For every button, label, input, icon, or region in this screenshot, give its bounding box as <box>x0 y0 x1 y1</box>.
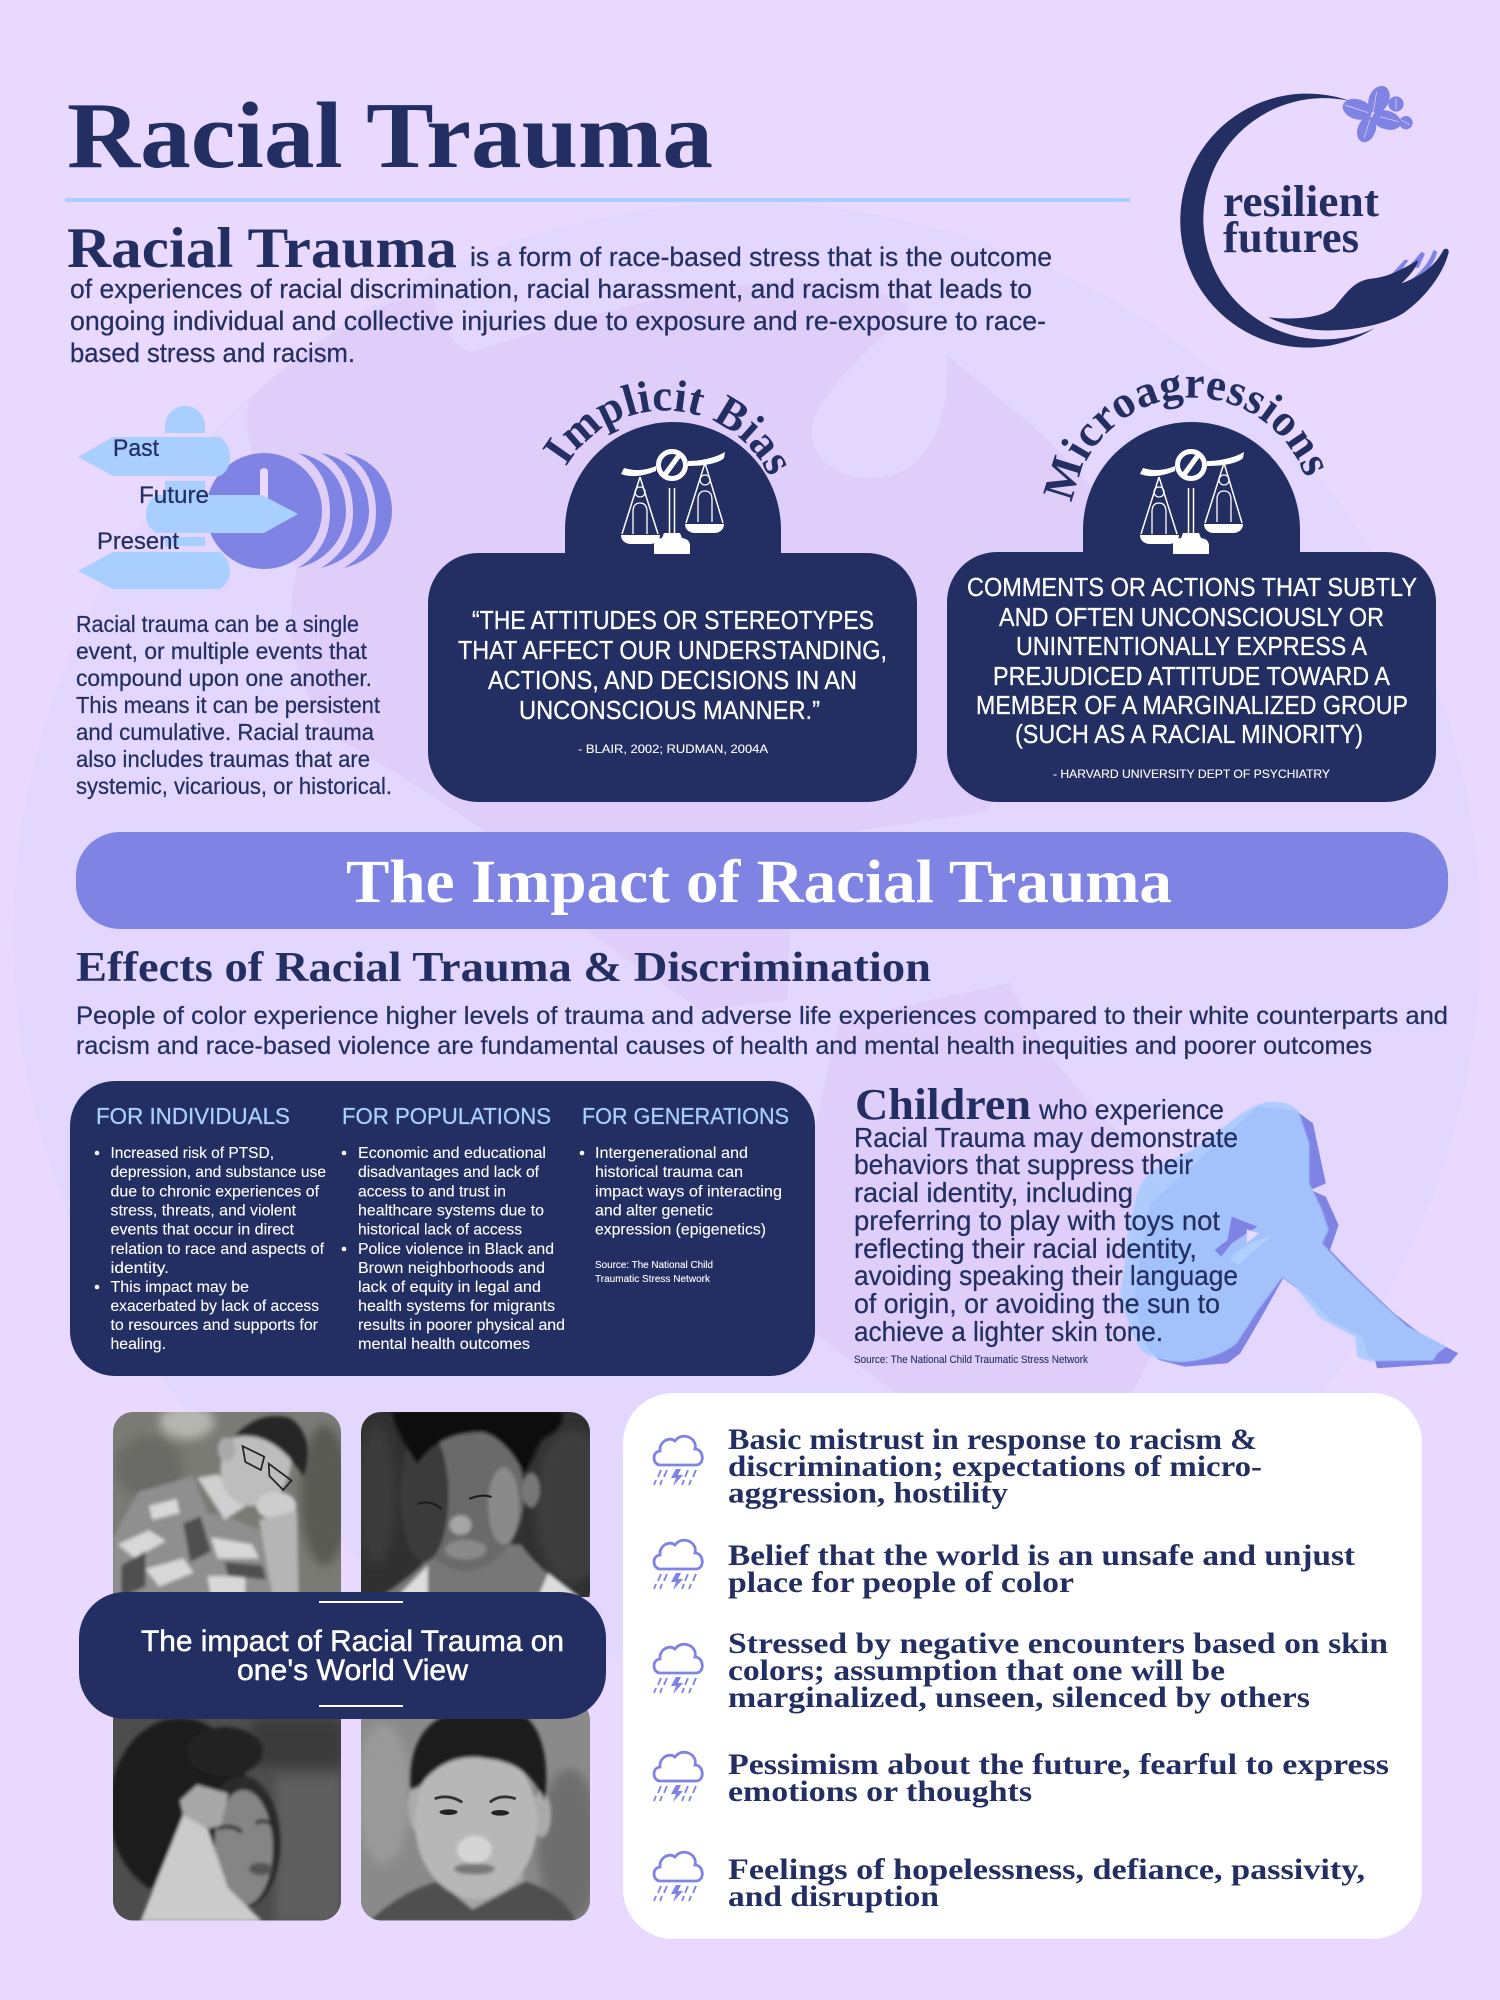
text: racial trauma can be single or multiple: compound upon one another. <box>76 665 372 691</box>
column: for individuals: to resources and supports for <box>110 1317 319 1334</box>
text: children: Racial Trauma may demonstrate <box>854 1122 1238 1153</box>
text: children: Source: The National Child Traumatic Stress Network <box>854 1354 1088 1366</box>
text: children: achieve a lighter skin tone. <box>854 1316 1163 1347</box>
column: for generations: impact ways of interacting <box>595 1184 782 1200</box>
icon: clock and signpost: Present <box>97 528 179 555</box>
icon: clock and signpost: Future <box>139 482 209 509</box>
item: negative encounters: Stressed by negative encounters based on skin <box>728 1627 1388 1660</box>
item: hopelessness: and disruption <box>728 1880 939 1913</box>
photo: girl looking down <box>361 1412 590 1598</box>
column: for individuals: healing. <box>110 1336 166 1353</box>
column: for generations: FOR GENERATIONS <box>582 1103 789 1129</box>
text: people of color: People of color experience higher levels of trauma and adverse life experiences compared to their white counterparts and <box>76 1002 1448 1030</box>
column: for individuals: due to chronic experiences of <box>110 1184 320 1200</box>
column: for individuals: This impact may be <box>110 1279 249 1296</box>
column: for populations: Police violence in Black and <box>358 1241 554 1258</box>
definition paragraph: ongoing individual and collective injuries due to exposure and re-exposure to race- <box>70 306 1046 336</box>
definition: UNINTENTIONALLY EXPRESS A <box>1016 633 1367 661</box>
title: Racial Trauma <box>67 84 713 188</box>
text: racial trauma can be single or multiple: systemic, vicarious, or historical. <box>76 773 392 799</box>
heading: effects of racial trauma: Effects of Racial Trauma & Discrimination <box>76 945 931 991</box>
quote: THAT AFFECT OUR UNDERSTANDING, <box>458 637 887 665</box>
column: for populations: access to and trust in <box>358 1184 506 1200</box>
text: children: behaviors that suppress their <box>854 1149 1193 1180</box>
quote <box>458 607 887 725</box>
column: for individuals: stress, threats, and violent <box>110 1202 297 1220</box>
icon: storm cloud <box>654 1852 702 1902</box>
title divider <box>65 198 1130 202</box>
panel: microagressions: - HARVARD UNIVERSITY DEPT OF PSYCHIATRY <box>1053 767 1330 781</box>
item: unsafe world: Belief that the world is an unsafe and unjust <box>728 1539 1355 1572</box>
column: for populations <box>342 1103 565 1353</box>
logo: resilient futures <box>1180 82 1449 348</box>
column: for generations: Traumatic Stress Network <box>595 1273 711 1285</box>
column: for individuals <box>95 1103 326 1353</box>
column: for populations: healthcare systems due to <box>358 1202 544 1220</box>
text: racial trauma can be single or multiple: and cumulative. Racial trauma <box>76 719 375 745</box>
column: for individuals: events that occur in direct <box>110 1222 295 1238</box>
panel: implicit bias <box>428 380 917 802</box>
text: racial trauma can be single or multiple <box>76 611 392 799</box>
column: for generations: historical trauma can <box>595 1164 743 1181</box>
item: unsafe world <box>654 1539 1355 1599</box>
item: basic mistrust: aggression, hostility <box>728 1476 1008 1510</box>
banner: the impact on world view: one's World View <box>237 1654 468 1687</box>
panel: implicit bias: - BLAIR, 2002; RUDMAN, 2004A <box>578 742 768 756</box>
definition paragraph: based stress and racism. <box>70 338 355 368</box>
column: for generations: and alter genetic <box>595 1202 713 1220</box>
photo: boy frowning <box>356 1706 600 1923</box>
column: for generations: Intergenerational and <box>595 1145 748 1162</box>
panel: effects by level <box>70 1081 815 1376</box>
icon: scales <box>621 452 725 554</box>
column: for individuals: Increased risk of PTSD, <box>110 1145 274 1162</box>
definition paragraph: is a form of race-based stress that is the outcome <box>470 242 1052 272</box>
column: for generations <box>580 1103 789 1285</box>
item: basic mistrust: discrimination; expectations of micro- <box>728 1450 1262 1483</box>
column: for individuals: FOR INDIVIDUALS <box>96 1103 290 1129</box>
column: for populations: health systems for migrants <box>358 1298 555 1315</box>
quote: ACTIONS, AND DECISIONS IN AN <box>488 667 857 695</box>
text: children: reflecting their racial identity, <box>854 1233 1197 1264</box>
definition: AND OFTEN UNCONSCIOUSLY OR <box>999 604 1384 632</box>
photo: girl with hand on forehead <box>109 1706 345 1923</box>
definition: COMMENTS OR ACTIONS THAT SUBTLY <box>967 574 1417 602</box>
dome and card <box>947 422 1436 802</box>
figure: seated child silhouette <box>1121 1102 1458 1368</box>
definition paragraph: Racial Trauma <box>67 217 457 280</box>
item: negative encounters: marginalized, unseen, silenced by others <box>728 1681 1310 1714</box>
item: basic mistrust: Basic mistrust in response to racism & <box>728 1423 1257 1456</box>
item: pessimism: Pessimism about the future, fearful to express <box>728 1748 1389 1781</box>
item: hopelessness <box>654 1852 1365 1913</box>
text: racial trauma can be single or multiple: also includes traumas that are <box>76 746 370 772</box>
item: unsafe world: place for people of color <box>728 1566 1074 1599</box>
clock <box>206 453 392 569</box>
icon: storm cloud <box>654 1540 702 1590</box>
banner: the impact of racial trauma <box>76 832 1448 929</box>
icon: clock and signpost <box>78 406 392 589</box>
item: basic mistrust <box>654 1423 1262 1510</box>
icon: storm cloud <box>654 1644 702 1694</box>
item: hopelessness: Feelings of hopelessness, defiance, passivity, <box>728 1853 1365 1886</box>
text: racial trauma can be single or multiple: Racial trauma can be a single <box>76 611 359 637</box>
photo: boy with glasses <box>111 1404 349 1597</box>
text: children: preferring to play with toys not <box>854 1205 1220 1236</box>
icon: flower <box>1340 82 1413 145</box>
text: people of color: racism and race-based violence are fundamental causes of health and mental health inequities and poorer outcomes <box>76 1032 1372 1060</box>
column: for individuals: identity. <box>110 1260 169 1277</box>
text: people of color <box>76 1002 1448 1060</box>
column: for individuals: exacerbated by lack of access <box>110 1298 319 1315</box>
item: pessimism: emotions or thoughts <box>728 1775 1032 1808</box>
quote: UNCONSCIOUS MANNER.” <box>519 697 820 725</box>
banner: the impact of racial trauma: The Impact of Racial Trauma <box>346 849 1172 916</box>
column: for populations: mental health outcomes <box>358 1336 530 1353</box>
column: for populations: results in poorer physical and <box>358 1317 565 1334</box>
text: children: who experience <box>1038 1094 1224 1125</box>
panel: microagressions <box>947 374 1436 802</box>
dome and card <box>428 422 917 802</box>
text: children: of origin, or avoiding the sun to <box>854 1288 1220 1319</box>
column: for generations: expression (epigenetics) <box>595 1222 766 1238</box>
logo: resilient futures: resilient <box>1223 177 1379 226</box>
column: for individuals: depression, and substance use <box>110 1164 326 1181</box>
icon: hand <box>1268 249 1449 330</box>
icon: clock and signpost: Past <box>113 435 159 462</box>
item: pessimism <box>654 1748 1389 1808</box>
quote: “THE ATTITUDES OR STEREOTYPES <box>472 607 874 635</box>
column: for generations: Source: The National Child <box>595 1259 713 1271</box>
banner: the impact on world view <box>79 1592 606 1719</box>
logo: resilient futures: futures <box>1223 213 1359 262</box>
heading: implicit bias: Implicit Bias <box>542 380 786 474</box>
column: for populations: Brown neighborhoods and <box>358 1260 545 1277</box>
text: racial trauma can be single or multiple: This means it can be persistent <box>76 692 380 718</box>
item: negative encounters <box>654 1627 1388 1714</box>
column: for individuals: relation to race and aspects of <box>110 1241 325 1258</box>
text: racial trauma can be single or multiple: event, or multiple events that <box>76 638 367 664</box>
text: children: Children <box>855 1080 1031 1129</box>
icon: storm cloud <box>654 1752 702 1802</box>
definition paragraph <box>67 217 1052 368</box>
definition: (SUCH AS A RACIAL MINORITY) <box>1015 721 1363 749</box>
item: negative encounters: colors; assumption that one will be <box>728 1654 1225 1687</box>
icon: storm cloud <box>654 1436 702 1486</box>
definition: PREJUDICED ATTITUDE TOWARD A <box>993 663 1390 691</box>
banner: the impact on world view: The impact of Racial Trauma on <box>141 1625 564 1658</box>
column: for populations: disadvantages and lack of <box>358 1164 540 1181</box>
column: for populations: historical lack of access <box>358 1222 522 1238</box>
text: children: avoiding speaking their language <box>854 1260 1238 1291</box>
text: children <box>854 1080 1238 1366</box>
column: for populations: Economic and educational <box>358 1145 546 1162</box>
definition: MEMBER OF A MARGINALIZED GROUP <box>976 692 1408 720</box>
definition paragraph: of experiences of racial discrimination, racial harassment, and racism that leads to <box>70 274 1032 304</box>
panel: world view effects <box>623 1393 1422 1939</box>
signpost <box>78 406 298 589</box>
definition <box>967 574 1417 749</box>
icon: scales <box>1140 452 1244 554</box>
heading: microagressions: Microagressions <box>1043 374 1324 502</box>
text: children: racial identity, including <box>854 1177 1133 1208</box>
column: for populations: lack of equity in legal and <box>358 1279 541 1296</box>
column: for populations: FOR POPULATIONS <box>342 1103 551 1129</box>
